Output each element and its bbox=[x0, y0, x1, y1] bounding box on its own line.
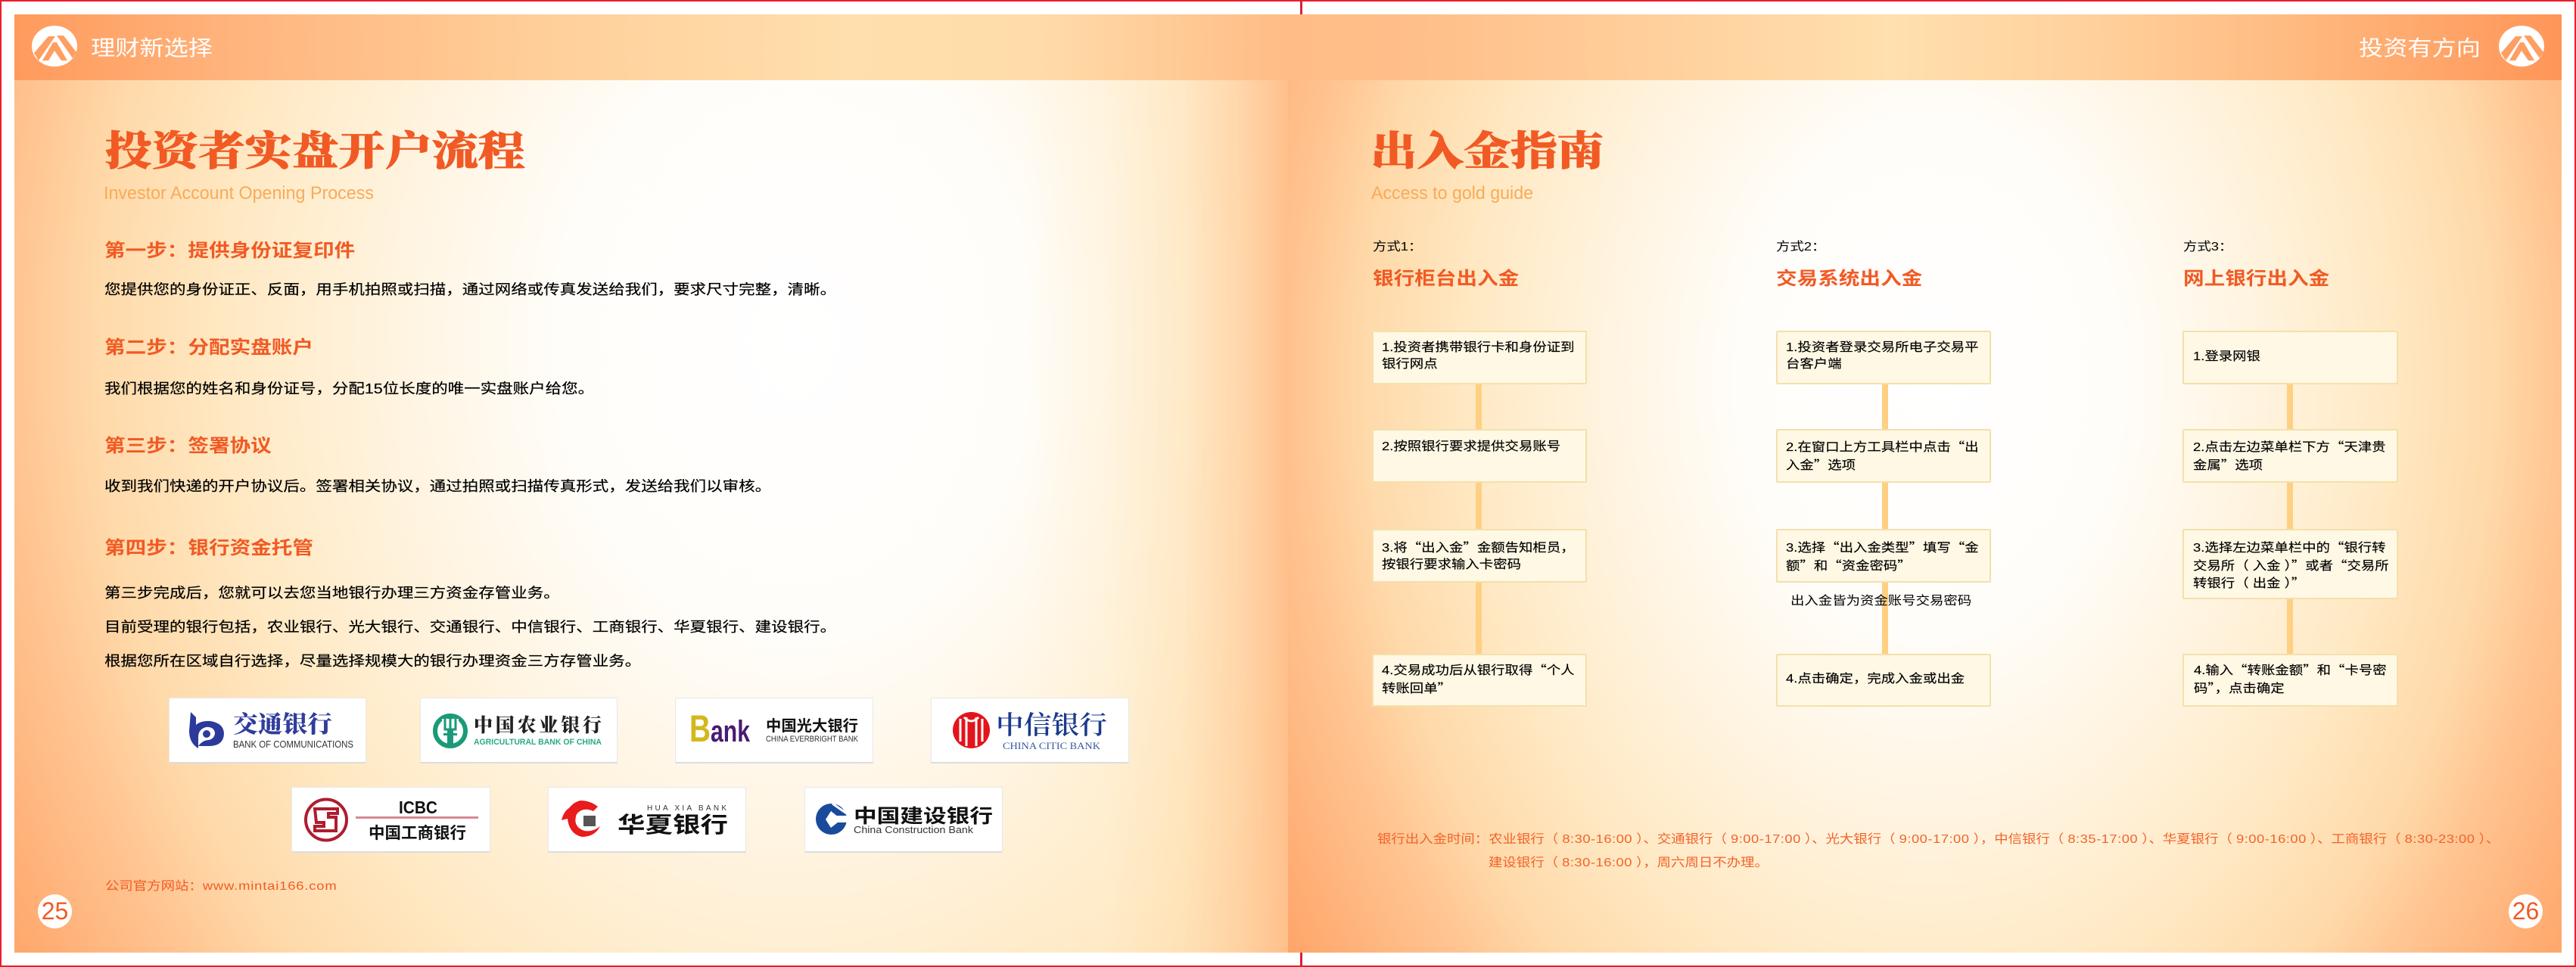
flow box 3-1 bbox=[2182, 331, 2398, 384]
logo: China Everbright Bank: 中国光大银行 bbox=[766, 717, 858, 735]
flow box 3-2: 2.点击左边菜单栏下方“天津贵 bbox=[2193, 437, 2386, 455]
logo: Bank of Communications: 交通银行 bbox=[233, 705, 332, 739]
logo: Bank of Communications bbox=[169, 698, 366, 763]
logo: China Construction Bank: China Construction Bank bbox=[854, 824, 974, 835]
logo: China CITIC Bank bbox=[931, 698, 1129, 763]
subtitle: right page: Access to gold guide bbox=[1371, 183, 1533, 204]
step 2 heading: 第二步：分配实盘账户 bbox=[104, 337, 313, 358]
step 4 text line 2: 目前受理的银行包括，农业银行、光大银行、交通银行、中信银行、工商银行、华夏银行、建设银行。 bbox=[104, 619, 836, 635]
connector column 3 bbox=[2287, 384, 2293, 654]
method 1 label: 方式1： bbox=[1373, 241, 1422, 253]
method 3 label: 方式3： bbox=[2183, 241, 2232, 253]
method 1 title: 银行柜台出入金 bbox=[1373, 269, 1519, 289]
page number 25 bbox=[38, 894, 72, 928]
flow box 1-2: 2.按照银行要求提供交易账号 bbox=[1382, 440, 1560, 453]
step 4 text line 3: 根据您所在区域自行选择，尽量选择规模大的银行办理资金三方存管业务。 bbox=[104, 653, 641, 669]
flow box 2-3 bbox=[1776, 529, 1991, 583]
logo: Agricultural Bank of China: AGRICULTURAL BANK OF CHINA bbox=[474, 738, 602, 747]
spine tick top bbox=[1300, 0, 1302, 14]
flow box 1-1: 1.投资者携带银行卡和身份证到 bbox=[1382, 341, 1575, 354]
step 3 text: 收到我们快递的开户协议后。签署相关协议，通过拍照或扫描传真形式，发送给我们以审核。 bbox=[104, 478, 771, 494]
header text left: 理财新选择 bbox=[91, 36, 213, 60]
logo: ICBC: ICBC bbox=[399, 798, 437, 817]
step 1 heading: 第一步：提供身份证复印件 bbox=[104, 241, 355, 261]
logo: China Everbright Bank: B bbox=[689, 707, 711, 750]
connector column 2 bbox=[1882, 384, 1888, 654]
flow box 1-1: 银行网点 bbox=[1382, 358, 1438, 371]
flow box 3-2 bbox=[2182, 429, 2398, 483]
flow box 1-3 bbox=[1372, 529, 1587, 583]
logo: Huaxia Bank: 华夏银行 bbox=[618, 813, 728, 838]
flow box 3-3: 3.选择左边菜单栏中的“银行转 bbox=[2193, 537, 2386, 555]
flow box 3-4 bbox=[2182, 654, 2398, 707]
right page background bbox=[1288, 14, 2562, 953]
logo: ICBC: 中国工商银行 bbox=[369, 825, 466, 842]
icon: left logo bbox=[32, 26, 77, 67]
note under box 2-3: 出入金皆为资金账号交易密码 bbox=[1790, 595, 1971, 608]
subtitle: left page: Investor Account Opening Process bbox=[104, 183, 374, 204]
flow box 2-4: 4.点击确定，完成入金或出金 bbox=[1786, 673, 1965, 686]
flow box 1-2 bbox=[1372, 429, 1587, 483]
flow box 1-4: 转账回单” bbox=[1382, 678, 1451, 696]
logo: Huaxia Bank bbox=[548, 787, 746, 853]
connector column 1 bbox=[1476, 384, 1482, 654]
website line: 公司官方网站：www.mintai166.com bbox=[105, 880, 338, 893]
flow box 1-4: 4.交易成功后从银行取得“个人 bbox=[1382, 660, 1575, 678]
flow box 3-4: 4.输入“转账金额”和“卡号密 bbox=[2194, 660, 2387, 678]
logo: China Everbright Bank: ank bbox=[711, 715, 751, 748]
logo: China Everbright Bank bbox=[675, 698, 873, 763]
left page background bbox=[14, 14, 1288, 953]
bank hours line 1: 银行出入金时间：农业银行（ 8:30-16:00 ）、交通银行（ 9:00-17:00 ）、光大银行（ 9:00-17:00 ），中信银行（ 8:35-17:00 ）、华夏银行（ 9:00-16:00 ）、工商银行（ 8:30-23:00 ）、 bbox=[1377, 833, 2500, 846]
header text right: 投资有方向 bbox=[2359, 36, 2481, 60]
method 2 label: 方式2： bbox=[1776, 241, 1825, 253]
flow box 1-4 bbox=[1372, 654, 1587, 707]
method 3 title: 网上银行出入金 bbox=[2183, 269, 2329, 289]
flow box 3-1: 1.登录网银 bbox=[2193, 350, 2260, 363]
step 4 text line 1: 第三步完成后，您就可以去您当地银行办理三方资金存管业务。 bbox=[104, 585, 560, 601]
flow box 1-3: 按银行要求输入卡密码 bbox=[1382, 558, 1521, 571]
logo: Bank of Communications: BANK OF COMMUNICATIONS bbox=[233, 738, 353, 750]
method 2 title: 交易系统出入金 bbox=[1776, 269, 1922, 289]
logo: China Everbright Bank: CHINA EVERBRIGHT BANK bbox=[766, 735, 859, 744]
flow box 2-4 bbox=[1776, 654, 1991, 707]
logo: China Construction Bank bbox=[804, 787, 1003, 853]
flow box 1-1 bbox=[1372, 331, 1587, 384]
flow box 2-1: 1.投资者登录交易所电子交易平 bbox=[1786, 341, 1979, 354]
logo: ICBC bbox=[291, 787, 490, 853]
bank hours line 2: 建设银行（ 8:30-16:00 ），周六周日不办理。 bbox=[1489, 857, 1769, 869]
page number 26 bbox=[2509, 894, 2543, 928]
step 3 heading: 第三步：签署协议 bbox=[104, 436, 272, 456]
step 1 text: 您提供您的身份证正、反面，用手机拍照或扫描，通过网络或传真发送给我们，要求尺寸完整，清晰。 bbox=[104, 281, 836, 297]
flow box 2-3: 3.选择“出入金类型”填写“金 bbox=[1786, 537, 1979, 555]
flow box 3-4: 码”，点击确定 bbox=[2194, 678, 2285, 696]
flow box 2-2: 入金”选项 bbox=[1786, 455, 1856, 473]
flow box 3-3: 交易所（ 入金 ）”或者“交易所 bbox=[2193, 555, 2389, 574]
flow box 2-1 bbox=[1776, 331, 1991, 384]
title: left page: 投资者实盘开户流程 bbox=[105, 129, 525, 174]
step 4 heading: 第四步：银行资金托管 bbox=[104, 538, 313, 558]
page number 25: 25 bbox=[42, 897, 68, 925]
flow box 2-3: 额”和“资金密码” bbox=[1786, 555, 1912, 574]
logo: Agricultural Bank of China: 中国农业银行 bbox=[474, 710, 602, 738]
flow box 2-2: 2.在窗口上方工具栏中点击“出 bbox=[1786, 437, 1979, 455]
header bar bbox=[14, 14, 2562, 80]
flow box 2-1: 台客户端 bbox=[1786, 358, 1842, 371]
flow box 3-3: 转银行（ 出金 ）” bbox=[2193, 573, 2305, 591]
flow box 2-2 bbox=[1776, 429, 1991, 483]
step 2 text: 我们根据您的姓名和身份证号，分配15位长度的唯一实盘账户给您。 bbox=[104, 381, 594, 396]
logo: China CITIC Bank: CHINA CITIC BANK bbox=[1003, 740, 1101, 751]
logo: China CITIC Bank: 中信银行 bbox=[996, 704, 1107, 742]
page number 26: 26 bbox=[2512, 897, 2539, 925]
logo: China Construction Bank: 中国建设银行 bbox=[854, 806, 993, 827]
spine tick bottom bbox=[1300, 953, 1302, 967]
flow box 3-2: 金属”选项 bbox=[2193, 455, 2263, 473]
flow box 1-3: 3.将“出入金”金额告知柜员， bbox=[1382, 537, 1575, 555]
title: right page: 出入金指南 bbox=[1370, 129, 1604, 174]
icon: right logo bbox=[2499, 26, 2544, 67]
flow box 3-3 bbox=[2182, 529, 2398, 599]
logo: Agricultural Bank of China bbox=[420, 698, 618, 763]
logo: Huaxia Bank: HUA XIA BANK bbox=[647, 804, 726, 813]
